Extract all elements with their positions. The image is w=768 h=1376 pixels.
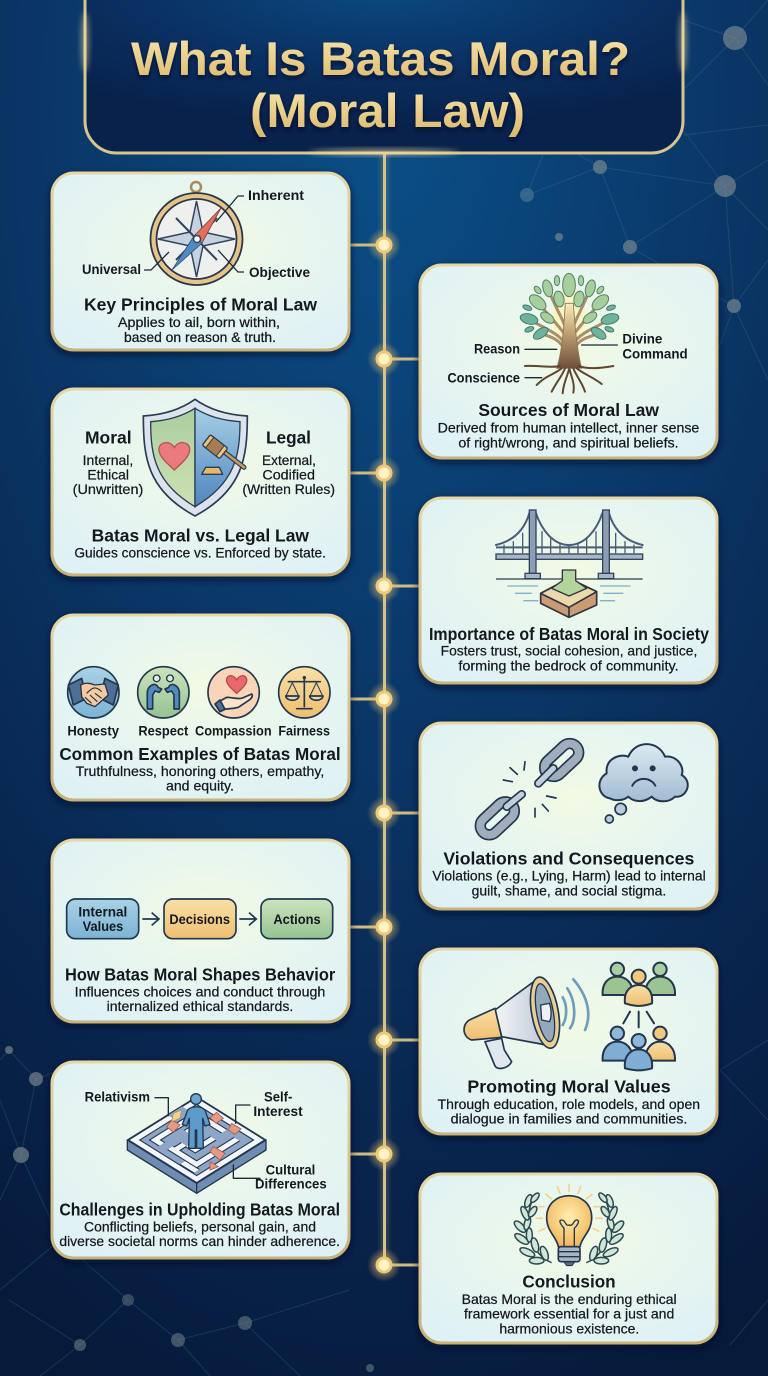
compass labels [82, 187, 310, 280]
compass labels: Universal [82, 261, 141, 277]
heading: Sources of Moral Law [478, 400, 660, 420]
icon: maze with figure [127, 1094, 266, 1193]
body text: harmonious existence. [499, 1321, 639, 1337]
arrow [142, 913, 159, 925]
body text: Fosters trust, social cohesion, and justice, [441, 643, 697, 659]
panel: challenges [52, 1062, 349, 1258]
heading: Common Examples of Batas Moral [59, 744, 341, 764]
icon: respect figures [138, 667, 189, 718]
flow: internal values: Internal [78, 904, 127, 920]
body text: internalized ethical standards. [107, 998, 293, 1014]
maze labels: Cultural [266, 1161, 315, 1177]
moral column [73, 427, 143, 497]
body text [462, 1291, 677, 1337]
flow: internal values: Values [83, 918, 124, 934]
icon: honesty handshake [68, 667, 119, 718]
legal column [242, 427, 335, 497]
timeline spine [349, 153, 420, 1265]
legal column: External, [262, 452, 316, 468]
maze labels: Interest [253, 1103, 303, 1119]
heading: Conclusion [522, 1272, 616, 1292]
tree labels [447, 330, 688, 386]
legal column: Codified [262, 466, 315, 482]
body text: framework essential for a just and [464, 1306, 674, 1322]
body text [59, 1219, 340, 1249]
moral column: Internal, [83, 452, 133, 468]
compass labels: Inherent [248, 187, 304, 203]
panel: moral vs legal [52, 389, 349, 575]
flow: decisions [164, 899, 236, 939]
body text: Violations (e.g., Lying, Harm) lead to internal [432, 868, 706, 884]
tree labels: Reason [474, 340, 520, 356]
icon: compassion hand and heart [208, 667, 259, 718]
body text [441, 643, 697, 673]
body text [438, 420, 700, 450]
heading: Batas Moral vs. Legal Law [92, 526, 310, 546]
title banner: (Moral Law) [250, 84, 525, 137]
body text: forming the bedrock of community. [458, 657, 679, 673]
heading: Key Principles of Moral Law [84, 294, 317, 314]
flow: internal values [67, 899, 139, 939]
tree labels: Command [622, 345, 688, 361]
tree labels: Divine [622, 330, 663, 346]
example labels: Respect [138, 722, 189, 738]
maze labels: Self- [264, 1089, 293, 1105]
flow: actions: Actions [273, 911, 321, 927]
panel: promoting moral values [420, 949, 717, 1134]
heading: Importance of Batas Moral in Society [429, 624, 709, 644]
icon: sad thought cloud [599, 744, 688, 823]
body text [75, 984, 325, 1014]
panel: sources of moral law [420, 265, 717, 458]
maze labels [85, 1089, 327, 1192]
compass labels: Objective [249, 264, 310, 280]
example labels: Fairness [278, 722, 330, 738]
body text: dialogue in families and communities. [451, 1110, 687, 1126]
arrow [239, 913, 256, 925]
body text [118, 314, 280, 345]
body text: Batas Moral is the enduring ethical [462, 1291, 677, 1307]
moral column: Ethical [87, 466, 129, 482]
body text [438, 1096, 700, 1126]
icon: bridge and foundation [496, 510, 643, 617]
legal column: (Written Rules) [242, 481, 335, 497]
flow: decisions: Decisions [169, 911, 230, 927]
tree labels: Conscience [447, 370, 520, 386]
body text: diverse societal norms can hinder adherence. [59, 1233, 340, 1249]
heading: How Batas Moral Shapes Behavior [65, 964, 336, 984]
legal column: Legal [266, 427, 311, 447]
body text: Through education, role models, and open [438, 1096, 700, 1112]
timeline nodes [367, 228, 401, 1282]
title banner [81, 0, 687, 155]
icon: light bulb with laurels [512, 1184, 626, 1266]
moral column: Moral [85, 427, 132, 447]
panel: violations and consequences [420, 723, 717, 909]
maze labels: Relativism [85, 1089, 150, 1105]
icon: community groups [603, 963, 675, 1070]
panel: shapes behavior [52, 840, 349, 1022]
heading: Promoting Moral Values [467, 1077, 671, 1097]
maze labels: Differences [255, 1176, 327, 1192]
moral column: (Unwritten) [73, 481, 143, 497]
panel: key principles [52, 173, 349, 350]
body text: and equity. [166, 777, 234, 793]
panel: conclusion [420, 1174, 717, 1343]
body text: based on reason & truth. [124, 329, 276, 345]
example labels [67, 722, 330, 738]
panel: common examples [52, 615, 349, 800]
icon: compass [150, 182, 242, 285]
body text: Conflicting beliefs, personal gain, and [84, 1219, 316, 1235]
panel: importance in society [420, 498, 717, 683]
icon: megaphone [464, 975, 564, 1068]
body text: of right/wrong, and spiritual beliefs. [458, 434, 679, 450]
body text: Influences choices and conduct through [75, 984, 325, 1000]
title banner: What Is Batas Moral? [131, 32, 630, 85]
icon: tree [519, 273, 620, 393]
heading: Violations and Consequences [443, 848, 694, 868]
body text: Truthfulness, honoring others, empathy, [76, 763, 324, 779]
heading: Challenges in Upholding Batas Moral [59, 1200, 340, 1220]
icon: shield with heart and gavel [143, 399, 247, 516]
body text [76, 763, 324, 793]
icon: sound waves [563, 979, 588, 1030]
body text: Guides conscience vs. Enforced by state. [74, 544, 326, 560]
body text: Applies to ail, born within, [118, 314, 280, 330]
body text: guilt, shame, and social stigma. [472, 882, 666, 898]
icon: broken chain [477, 740, 582, 839]
body text [432, 868, 706, 898]
icon: fairness scales [279, 667, 330, 718]
flow: actions [261, 899, 333, 939]
body text: Derived from human intellect, inner sense [438, 420, 700, 436]
example labels: Compassion [195, 722, 272, 738]
example labels: Honesty [67, 722, 119, 738]
